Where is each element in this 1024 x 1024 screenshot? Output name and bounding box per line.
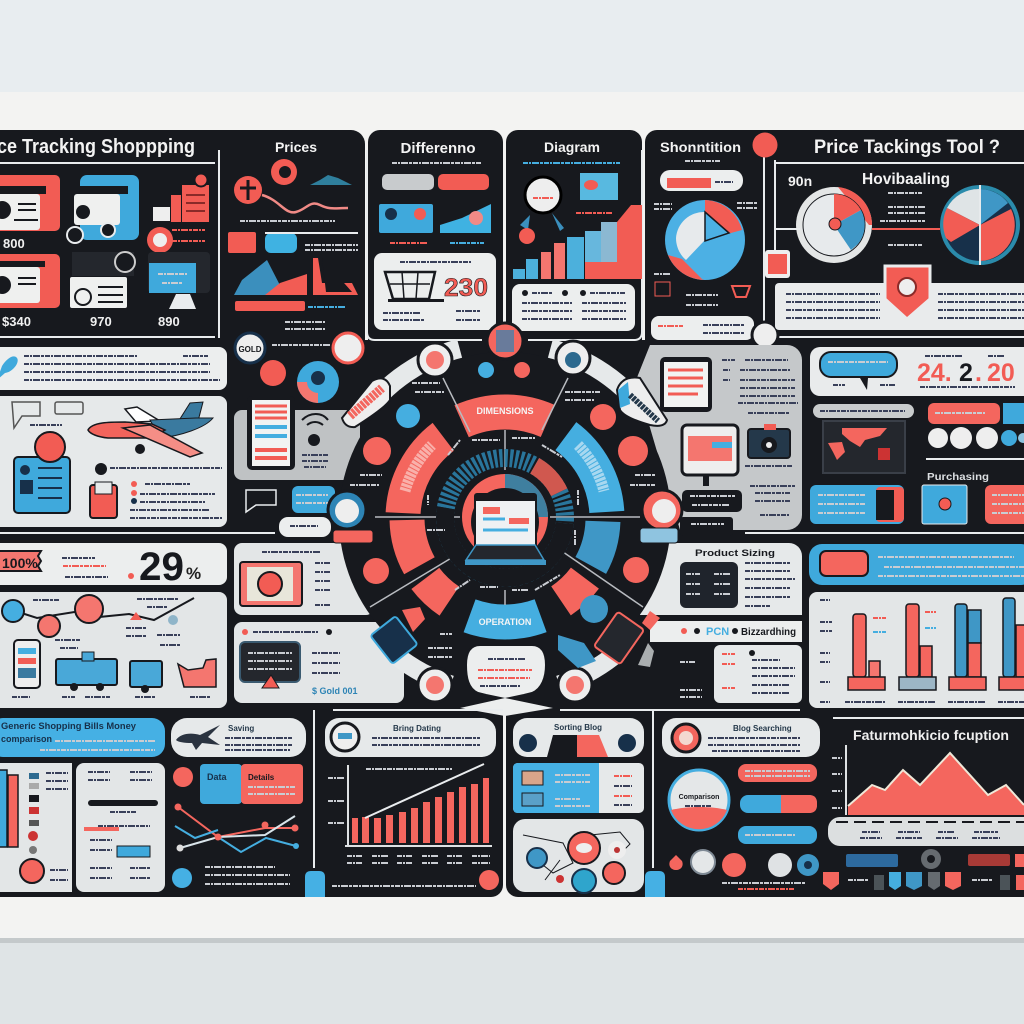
heading: purchasing: Purchasing <box>927 472 989 483</box>
icon: blue truck <box>56 652 117 691</box>
panel: growth chart <box>325 718 499 890</box>
donut chart <box>665 200 745 280</box>
panel: product sizing <box>640 543 802 615</box>
panel: route map <box>0 592 227 708</box>
panel: comparison list <box>0 763 165 892</box>
segment label: DIMENSIONS <box>476 406 534 416</box>
shield icon <box>885 266 930 319</box>
bars group three <box>949 604 986 690</box>
panel: shopping donut <box>651 132 1024 348</box>
panel: differences <box>374 140 496 330</box>
magnifier <box>519 177 564 244</box>
panel: browsing laptop: $ Gold 001 <box>312 686 358 696</box>
bar annotations <box>873 612 936 632</box>
bars group two <box>899 604 936 690</box>
panel: 29 percent: % <box>186 564 201 583</box>
buttons row <box>228 232 358 253</box>
price labels: 890 <box>158 314 180 329</box>
price labels: 970 <box>90 314 112 329</box>
panel: 29 percent: 100% <box>2 555 38 571</box>
icon: wifi <box>302 414 328 467</box>
panel: blue banner <box>0 718 165 757</box>
sorting header: Sorting Blog <box>554 723 602 732</box>
panel: compare tiles and lines <box>172 764 325 897</box>
heading: tracking shopping: ce Tracking Shoppping <box>0 136 195 158</box>
feature tiles <box>810 485 1024 524</box>
chips <box>846 849 1024 869</box>
icon: red dot <box>173 767 193 787</box>
icon: blue tab <box>645 871 665 897</box>
white notes <box>512 284 635 331</box>
heading: shopping: Shonntition <box>660 139 741 155</box>
segment label: OPERATION <box>479 617 531 627</box>
panel: saving column: Blog Searching <box>733 724 792 733</box>
pills <box>738 764 817 844</box>
heading: diagram: Diagram <box>544 139 600 155</box>
ring nodes <box>328 323 682 702</box>
circle badge: Comparison <box>679 794 719 801</box>
badges <box>235 333 363 363</box>
circle badge <box>669 770 729 830</box>
panel: browsing laptop <box>234 622 404 703</box>
small dots <box>363 362 649 584</box>
blue picture <box>576 173 618 213</box>
panel: 29 percent <box>0 543 227 589</box>
speech leaf right <box>617 378 667 426</box>
tiles: Details <box>248 773 275 782</box>
panel: prices <box>228 139 363 363</box>
segmented pie <box>940 185 1020 265</box>
axis band <box>828 817 1024 846</box>
mini bars <box>0 770 18 847</box>
icon: monitor <box>682 425 738 486</box>
panel: bar chart <box>809 592 1024 708</box>
panel: price tracking tool <box>775 137 1024 330</box>
icon: phone <box>14 640 40 688</box>
panel: top left shopping <box>0 136 219 338</box>
panel: flight card <box>0 396 227 527</box>
icon: blue dot <box>172 868 192 888</box>
laptop <box>462 474 548 565</box>
lower right device <box>558 595 660 668</box>
price labels: 800 <box>3 236 25 251</box>
ring labels <box>427 438 578 590</box>
icon: red target <box>20 859 44 883</box>
route line <box>2 595 194 648</box>
progress bar <box>235 301 345 345</box>
notes <box>880 193 925 245</box>
labels <box>333 528 678 543</box>
area chart <box>846 745 1024 815</box>
segment hatch text <box>405 445 604 491</box>
pill gauge <box>660 170 743 191</box>
heading: differences: Differenno <box>400 140 476 157</box>
gauge pie <box>775 187 940 263</box>
bars and trendline <box>345 764 492 846</box>
panel: 29 percent: 29 <box>139 545 184 589</box>
icon: blue dial <box>297 361 339 403</box>
panel: mini legend <box>680 645 802 703</box>
lower left device <box>370 607 452 664</box>
dark strip <box>84 800 158 857</box>
heading: tool: Price Tackings Tool ? <box>814 137 1000 158</box>
price labels <box>2 236 180 329</box>
notes <box>205 867 290 884</box>
banner: blue callout <box>809 544 1024 585</box>
icon: monitor <box>148 252 210 309</box>
panel: dates: 20 <box>987 359 1015 387</box>
label: 90n <box>788 173 812 189</box>
side labels <box>350 383 655 485</box>
icon: blue document <box>14 432 70 513</box>
icon: tablet <box>660 357 712 412</box>
panel: intro note <box>0 347 227 390</box>
icon: red card one <box>0 175 60 231</box>
speech bubbles <box>246 486 335 537</box>
panel: bar title strip: PCN <box>706 626 729 638</box>
white cart card <box>374 253 496 330</box>
divider <box>0 532 275 534</box>
panel: bar title strip <box>650 621 802 642</box>
icon: airplane <box>88 402 213 457</box>
icon: blue tab <box>305 871 325 897</box>
tiles: Data <box>207 772 228 782</box>
panel: bar title strip: Bizzardhing <box>741 627 796 638</box>
dark board <box>0 130 1024 897</box>
outer ring pieces <box>330 343 680 693</box>
icon: camera <box>748 424 790 458</box>
white cart card: 230 <box>444 274 488 302</box>
buttons <box>680 490 742 536</box>
panel: product sizing: Product Sizing <box>695 548 775 558</box>
panel: dates <box>810 347 1024 396</box>
tag row <box>928 403 1024 449</box>
notes <box>722 360 798 515</box>
bottom note <box>460 645 553 716</box>
panel: world map <box>813 404 914 473</box>
panel: devices gray <box>636 345 802 536</box>
icons row <box>823 872 1024 890</box>
panel: sorting column <box>513 718 665 897</box>
icon: white receipt <box>70 252 135 308</box>
icon: red badge <box>147 227 205 253</box>
node row <box>669 850 819 889</box>
icon: red card two <box>0 254 60 308</box>
blue cards <box>379 204 491 243</box>
bars group one <box>848 614 885 690</box>
icon: phone <box>247 396 295 470</box>
radial lines <box>370 378 643 607</box>
staircase bars <box>513 205 642 279</box>
dark disc <box>339 352 671 684</box>
panel: blue banner: comparison <box>1 734 52 744</box>
panel: air note <box>171 718 306 757</box>
icon: blue van <box>130 661 162 693</box>
panel: dates: . <box>975 359 982 387</box>
panel: fluctuation area chart <box>823 718 1024 890</box>
badges and rails <box>752 132 1024 348</box>
red and blue segments <box>399 412 611 624</box>
heading: fluctuation: Faturmohkicio fcuption <box>853 727 1009 743</box>
toggle buttons <box>382 174 489 190</box>
icon: red bar documents <box>153 174 209 222</box>
sorting header <box>513 718 644 757</box>
blue table <box>513 763 644 813</box>
line chart <box>174 804 299 852</box>
panel: growth chart: Bring Dating <box>393 724 441 733</box>
speech leaf left <box>342 378 390 427</box>
icon: red dot <box>260 360 286 386</box>
icons column <box>28 773 39 854</box>
subheading: Hovibaaling <box>862 171 950 188</box>
dividers <box>314 710 800 868</box>
panel: dates: 24. <box>917 359 952 387</box>
panel: dates: 2 <box>959 359 973 387</box>
mountain charts <box>234 258 358 295</box>
panel: tracking image <box>234 543 374 615</box>
inner data ring <box>445 458 565 578</box>
icon: red parcel <box>178 659 216 687</box>
network nodes <box>513 819 644 893</box>
heading: prices: Prices <box>275 139 317 155</box>
bars group four <box>999 598 1024 690</box>
price line with markers <box>234 159 352 221</box>
column: phone and wifi <box>234 360 360 537</box>
panel: blue banner: Generic Shopping Bills Money <box>1 721 136 731</box>
price labels: $340 <box>2 314 31 329</box>
panel: saving column <box>662 718 820 889</box>
white text panel <box>775 283 1024 330</box>
feature list <box>12 402 222 518</box>
white tag <box>651 316 754 340</box>
badges: GOLD <box>238 345 262 354</box>
central wheel <box>328 323 682 716</box>
axis labels <box>328 769 490 886</box>
icon: red dot <box>479 870 499 890</box>
icon: blue card <box>67 175 139 243</box>
panel: air note: Saving <box>228 724 254 733</box>
icon: shopping bag <box>90 482 117 518</box>
panel: telegram bars <box>512 139 642 331</box>
tiles <box>200 764 303 804</box>
legends <box>654 203 758 305</box>
